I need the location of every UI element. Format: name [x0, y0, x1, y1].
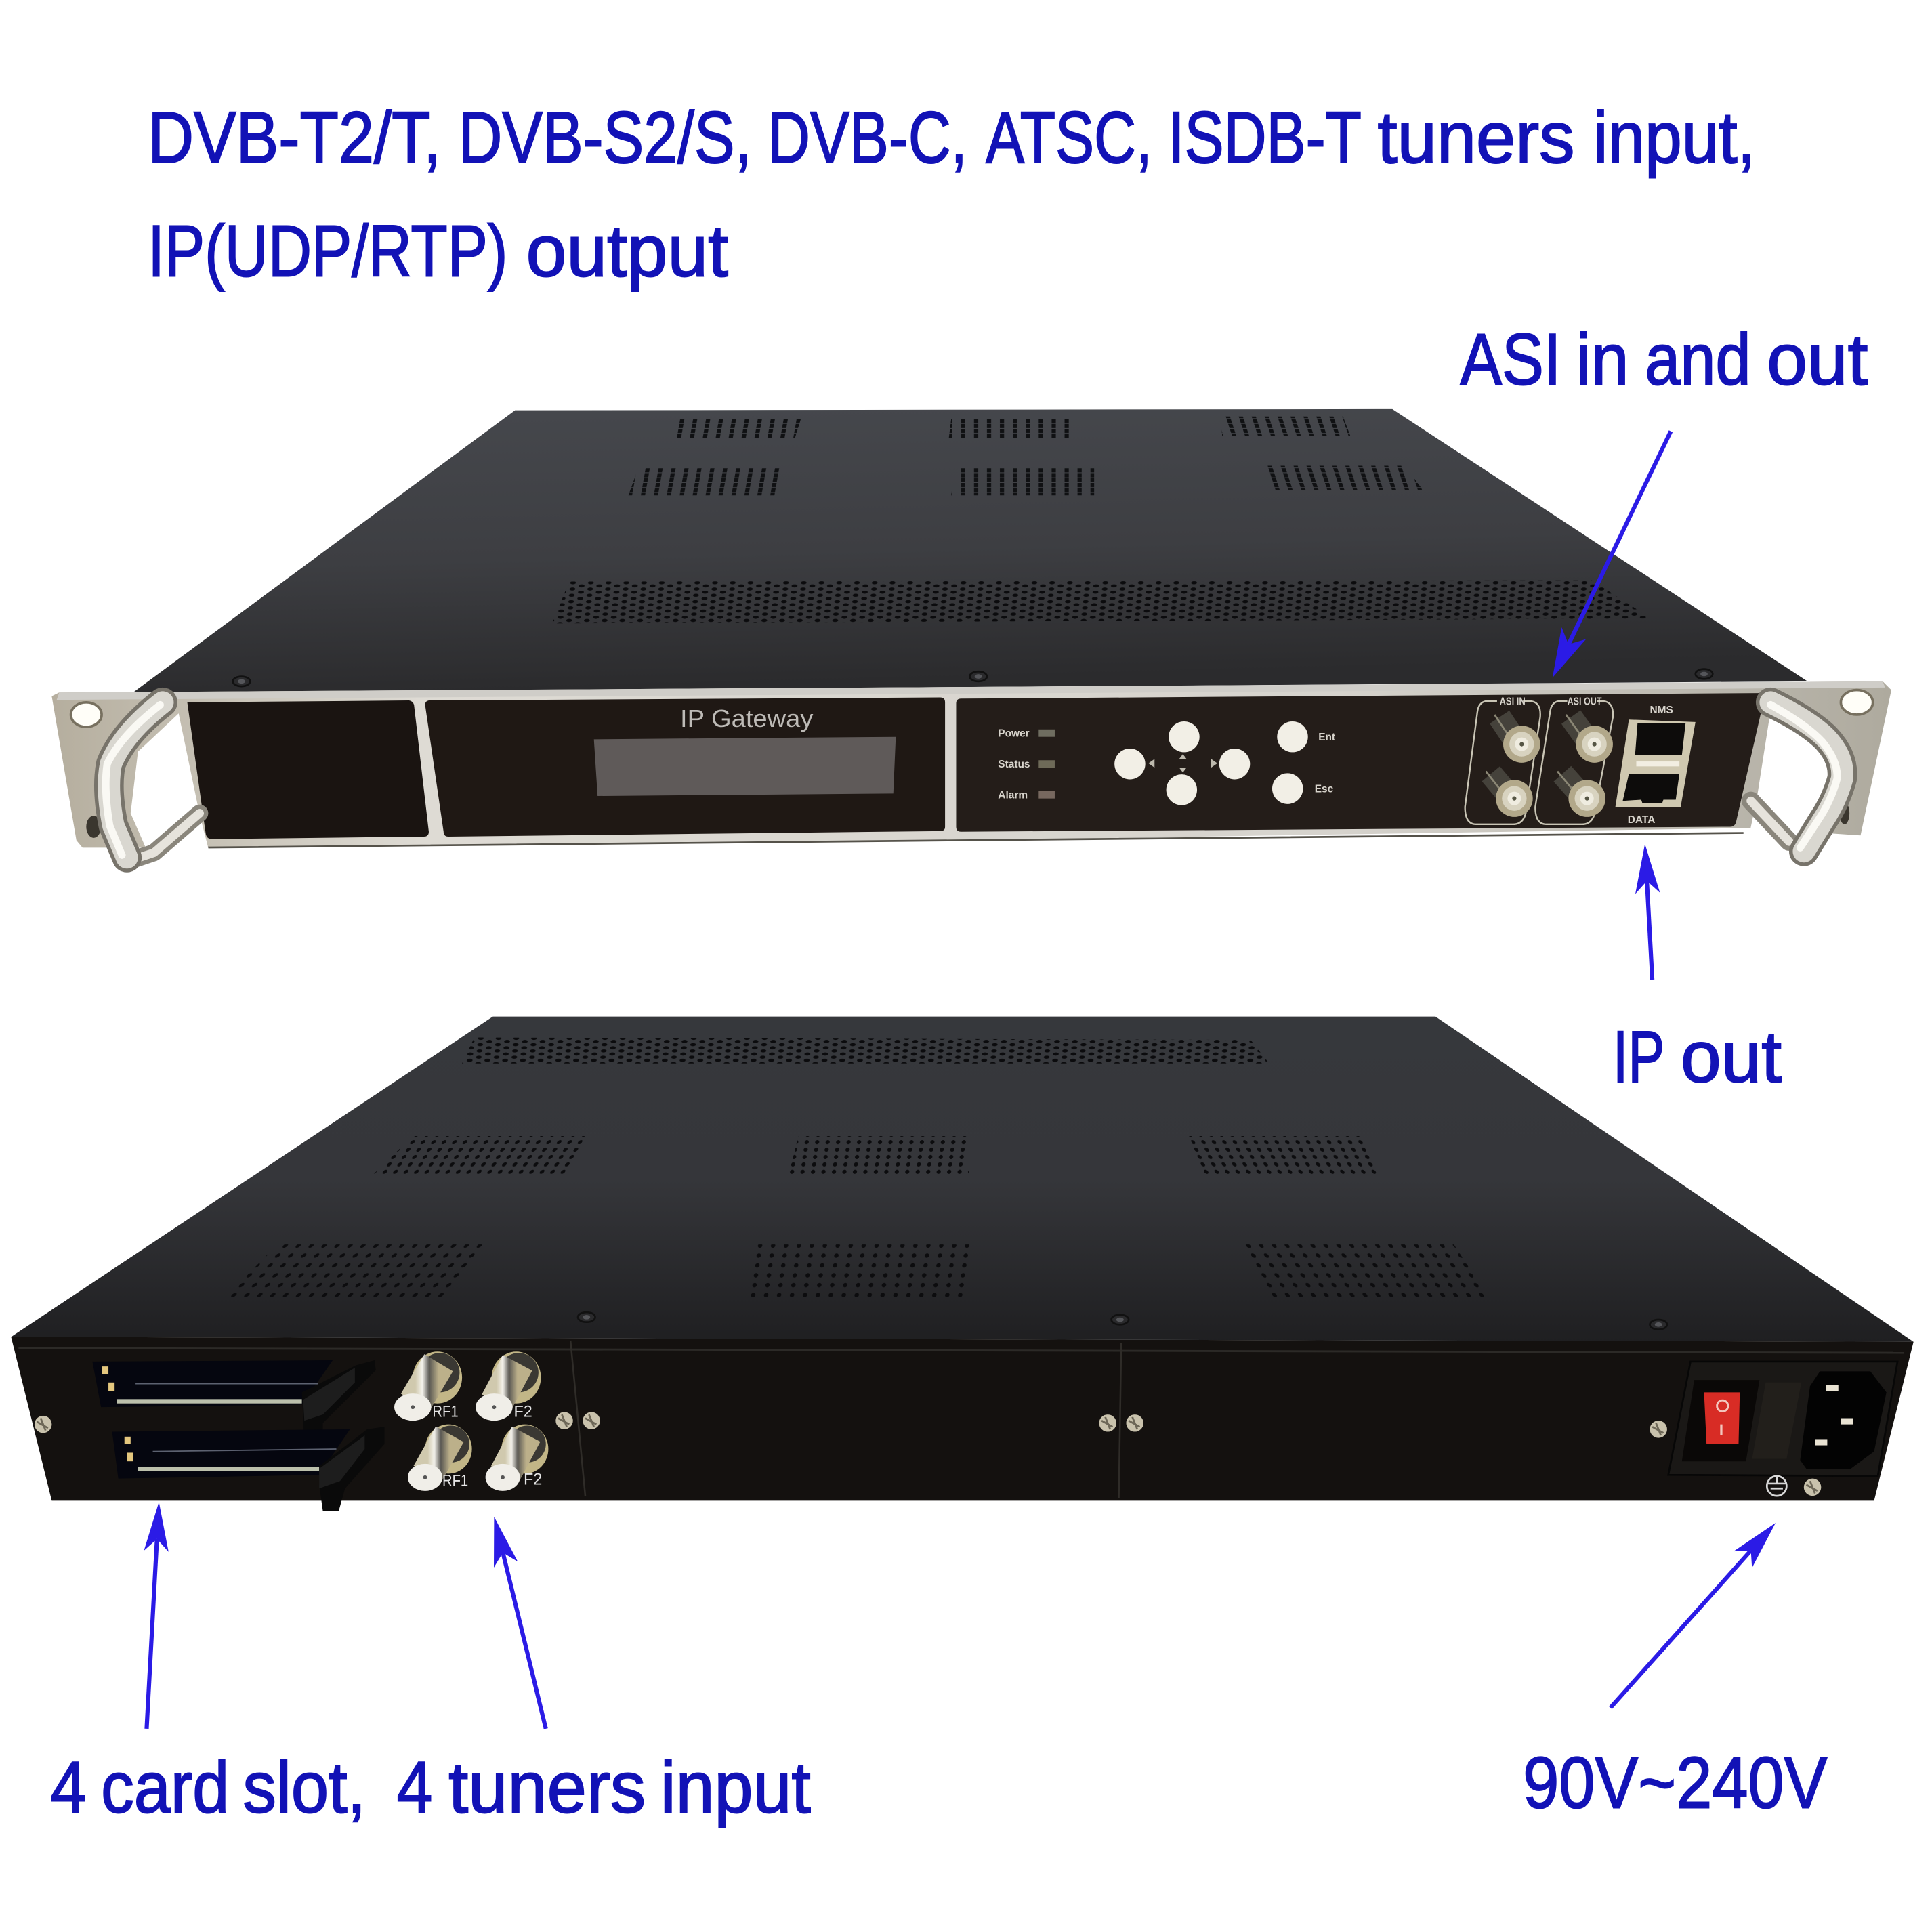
arrow: power [1610, 1523, 1776, 1708]
label: card slots and tuners [51, 1747, 811, 1828]
status labels and LEDs: Alarm [998, 790, 1028, 801]
frame lower edge [185, 833, 1744, 847]
arrow: card slots [144, 1502, 169, 1729]
rear screws [35, 1412, 1667, 1438]
connector RF1 top [394, 1351, 462, 1421]
label: card slots and tuners: 4 [51, 1747, 86, 1828]
label: card slots and tuners: tuners [448, 1747, 646, 1828]
RF labels: RF1 [442, 1473, 468, 1490]
title: first line: input, [1593, 97, 1756, 178]
ground symbol [1767, 1476, 1786, 1496]
top cover vents [552, 417, 1651, 623]
upper card slot [92, 1360, 333, 1407]
label: ASI in and out: ASI [1460, 318, 1561, 400]
cover screws [233, 669, 1713, 686]
label: ASI in and out: out [1767, 318, 1868, 400]
frame top highlight [57, 681, 1885, 700]
upper card latch [302, 1360, 376, 1444]
blank panel [187, 700, 429, 839]
right ear lower hole [1840, 802, 1849, 824]
silver front frame with rack ears [51, 681, 1891, 847]
ASI IN label: ASI IN [1500, 696, 1526, 707]
IEC socket [1800, 1371, 1887, 1469]
left handle [106, 702, 200, 860]
label: ASI in and out: in [1576, 318, 1629, 400]
arrow: tuners [494, 1517, 546, 1729]
RF labels [432, 1404, 542, 1490]
rear panel body [11, 1337, 1914, 1500]
title: second line: IP(UDP/RTP) [148, 210, 507, 291]
ASI in outline [1465, 701, 1540, 824]
connector RF1 bottom [408, 1425, 472, 1491]
label: IP out: out [1681, 1016, 1782, 1097]
label: card slots and tuners: input [660, 1747, 811, 1828]
LCD window [594, 737, 896, 796]
connector RF2 bottom [486, 1425, 548, 1491]
RJ45 ethernet ports [1616, 719, 1696, 807]
right ear hole [1841, 690, 1873, 715]
label: voltage: 90V~240V [1523, 1742, 1828, 1823]
RF labels: F2 [513, 1404, 532, 1421]
opening behind left handle [131, 713, 209, 853]
title: first line: tuners [1378, 97, 1575, 178]
DATA label: DATA [1628, 814, 1655, 826]
panel seam left [570, 1341, 585, 1496]
title: first line [148, 97, 1756, 178]
label: card slots and tuners: slot, [243, 1747, 366, 1828]
arrow: ASI in and out [1553, 432, 1671, 677]
opening behind right handle [1750, 718, 1840, 853]
product name: IP Gateway [680, 705, 814, 732]
ASI OUT label: ASI OUT [1568, 696, 1602, 707]
ground screw [1804, 1479, 1821, 1496]
device: front view [51, 409, 1891, 860]
panel seam middle [1119, 1343, 1121, 1498]
red rocker switch [1704, 1392, 1740, 1444]
navigation buttons [1114, 721, 1308, 805]
status labels and LEDs [998, 728, 1055, 801]
ASI out outline [1535, 701, 1613, 824]
label: ASI in and out: and [1645, 318, 1751, 400]
lower card latch [319, 1427, 384, 1511]
rocker switch bezel [1682, 1380, 1759, 1461]
cover screws [578, 1312, 1667, 1330]
arrow: IP out [1635, 844, 1660, 980]
chassis top cover [11, 1017, 1914, 1342]
status labels and LEDs: Power [998, 728, 1030, 740]
label: IP out [1613, 1016, 1782, 1097]
label: ASI in and out [1460, 318, 1868, 400]
left ear hole [71, 702, 102, 727]
power inlet module [1668, 1362, 1897, 1476]
rear panel top edge [18, 1348, 1904, 1353]
device: rear view [11, 1017, 1914, 1511]
NMS label: NMS [1650, 705, 1673, 716]
left ear lower hole [86, 816, 101, 838]
label: IP out: IP [1613, 1016, 1664, 1097]
right handle [1751, 702, 1843, 852]
chassis top cover [133, 409, 1807, 692]
label: card slots and tuners: card [101, 1747, 229, 1828]
title: first line: ISDB-T [1168, 97, 1362, 178]
lower card slot [112, 1429, 350, 1479]
title: first line: DVB-T2/T, [148, 97, 441, 178]
label: card slots and tuners: 4 [397, 1747, 432, 1828]
control and connector panel [956, 693, 1765, 832]
RF labels: F2 [524, 1471, 542, 1489]
status labels and LEDs: Status [998, 759, 1030, 770]
title: first line: DVB-S2/S, [459, 97, 752, 178]
Ent label: Ent [1318, 732, 1335, 743]
Esc label: Esc [1315, 784, 1334, 795]
title: second line: output [526, 210, 728, 291]
display panel [425, 697, 945, 837]
F connectors [394, 1351, 548, 1491]
top cover vents [222, 1037, 1491, 1301]
title: first line: DVB-C, [768, 97, 967, 178]
connector RF2 top [476, 1351, 541, 1421]
BNC connectors [1486, 715, 1613, 817]
RF labels: RF1 [432, 1404, 459, 1421]
fuse holder detail [1752, 1383, 1801, 1459]
title: first line: ATSC, [986, 97, 1152, 178]
